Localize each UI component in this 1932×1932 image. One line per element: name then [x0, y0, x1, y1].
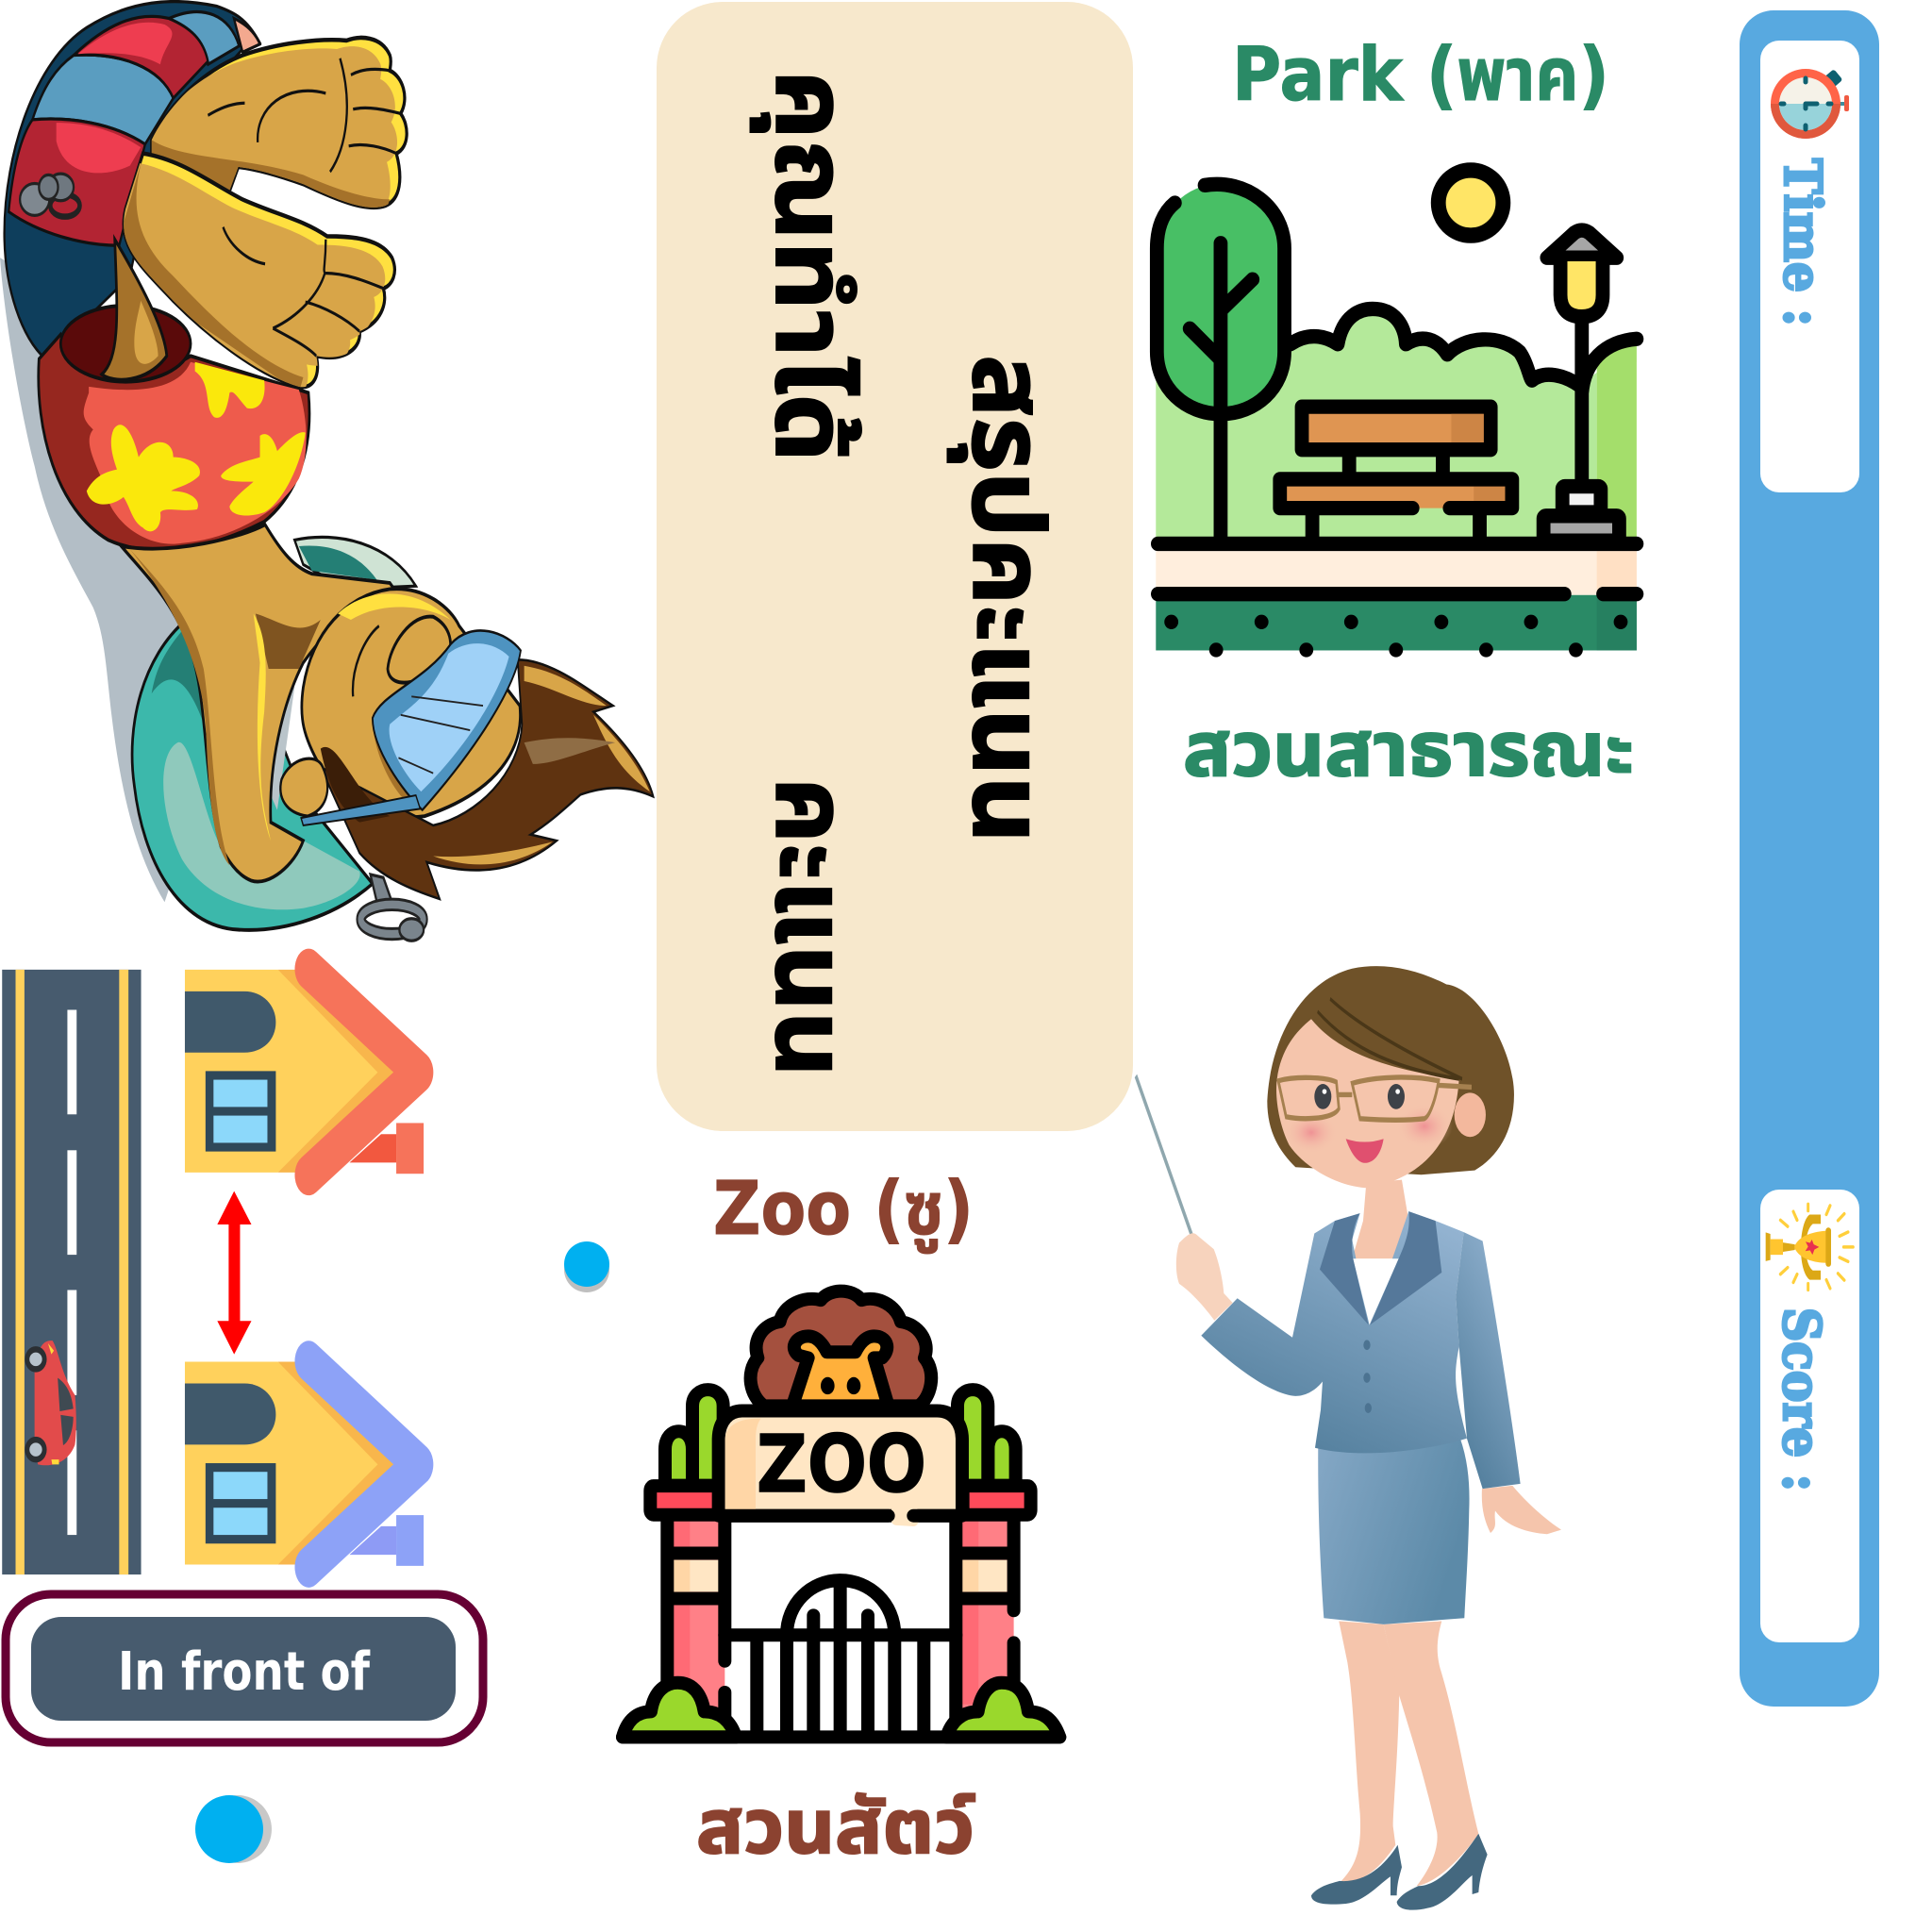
right sleeve — [1456, 1232, 1521, 1489]
shirt — [39, 335, 309, 550]
sun — [1439, 170, 1503, 236]
text: score summary: สรุปคะแนน — [947, 355, 1063, 843]
white blouse — [1353, 1258, 1399, 1324]
house orange roof — [185, 969, 424, 1175]
heading: Park: Park (พาค) — [1232, 33, 1609, 118]
mouth — [1346, 1139, 1384, 1163]
upper foot — [142, 38, 407, 216]
teal float — [132, 620, 373, 930]
goggles — [373, 630, 521, 810]
goggle strap — [301, 795, 420, 825]
icon: stopwatch — [1771, 69, 1849, 139]
lower foot — [114, 154, 394, 395]
road — [2, 970, 142, 1574]
caps — [650, 1486, 1031, 1515]
bushes — [623, 1683, 1059, 1737]
zoo gate icon — [623, 1291, 1059, 1737]
tree — [1157, 184, 1285, 541]
eyes — [1314, 1084, 1405, 1109]
zoo sign text: ZOO — [757, 1418, 926, 1510]
red car — [25, 1341, 76, 1465]
torso — [122, 525, 411, 882]
house blue roof — [185, 1361, 424, 1567]
heading: Zoo: Zoo (ซู) — [713, 1167, 974, 1254]
buttons — [1363, 1340, 1372, 1413]
text: zoo in thai: สวนสัตว์ — [696, 1785, 975, 1869]
glasses — [1278, 1077, 1472, 1120]
ear — [280, 758, 327, 816]
legs and feet — [102, 240, 167, 380]
street lamp — [1543, 230, 1637, 541]
ground — [1158, 543, 1637, 658]
cheek — [1396, 1104, 1453, 1149]
pillars — [667, 1516, 1014, 1719]
park icon — [1156, 170, 1637, 658]
face lower — [425, 706, 515, 813]
shadow — [0, 258, 260, 902]
hose — [361, 874, 424, 941]
lower hand — [1482, 1486, 1561, 1534]
button: In front of — [6, 1594, 483, 1742]
zoo sign — [719, 1411, 962, 1517]
lapels — [1320, 1211, 1441, 1324]
bench — [1280, 407, 1512, 538]
flowers — [87, 425, 200, 531]
score box — [1760, 1190, 1859, 1642]
text: you scored: คุณทำได้ — [750, 70, 866, 462]
sidebar — [1740, 10, 1879, 1707]
dot lower — [195, 1795, 272, 1863]
icon: trophy — [1766, 1204, 1853, 1290]
text: Time: Time : — [1773, 158, 1833, 326]
gate — [724, 1580, 956, 1733]
cartoon character — [0, 2, 653, 941]
jacket — [1201, 1211, 1467, 1453]
panel: score summary — [657, 2, 1133, 1131]
striped tube — [5, 2, 260, 359]
skirt — [1318, 1435, 1470, 1624]
text: park in thai: สวนสาธารณะ — [1183, 708, 1634, 791]
pointer — [1136, 1075, 1193, 1240]
hair — [321, 659, 653, 899]
legs — [1339, 1622, 1478, 1886]
whistle — [20, 174, 79, 217]
text: Score: Score : — [1772, 1307, 1832, 1491]
plants — [665, 1390, 1016, 1486]
double arrow — [217, 1191, 252, 1355]
park background — [1156, 306, 1637, 650]
dot upper — [564, 1241, 609, 1292]
head — [302, 589, 521, 817]
bush outline — [1291, 308, 1579, 386]
lion — [751, 1291, 931, 1406]
text: points: คะแนน — [755, 777, 866, 1077]
raised hand — [1176, 1233, 1233, 1321]
cheeks — [1285, 1111, 1338, 1154]
face — [1276, 1019, 1459, 1188]
time box — [1760, 41, 1859, 492]
ear — [1455, 1092, 1486, 1137]
neck — [1352, 1180, 1408, 1258]
shoes — [1311, 1834, 1488, 1910]
hair — [1267, 966, 1514, 1174]
button: In front of: In front of — [118, 1641, 371, 1703]
teacher — [1136, 966, 1561, 1910]
